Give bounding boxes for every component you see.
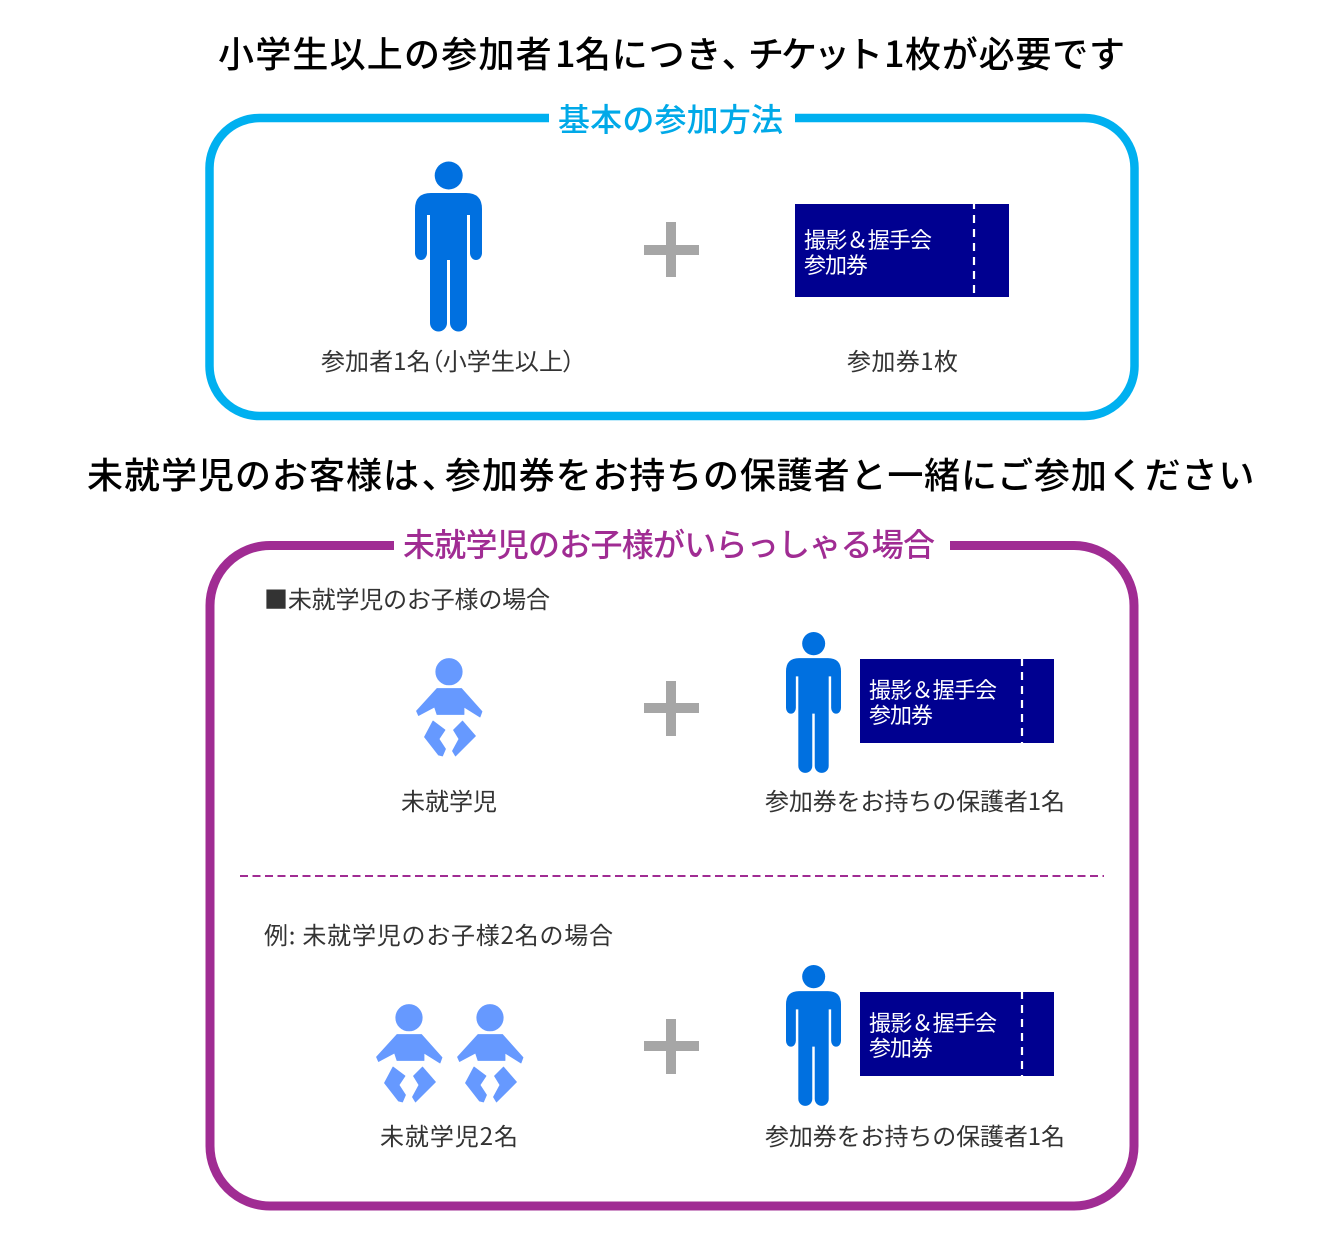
title: ticket requirement: チケット [748,26,880,78]
case 1 heading: ■未就学児のお子様の場合 [264,580,550,615]
icon: guardian [786,632,841,773]
label: two preschool children: 未就学児2名 [380,1117,518,1152]
icon: guardian [786,965,841,1106]
ticket [860,992,1054,1076]
ticket [860,659,1054,743]
ticket: 撮影＆握手会 [869,1006,997,1038]
panel heading: 基本の参加方法 [558,95,783,141]
panel heading: 未就学児のお子様がいらっしゃる場合 [403,520,935,566]
ticket [795,204,1009,297]
label: guardian with ticket: 参加券をお持ちの保護者1名 [765,1117,1065,1152]
icon: adult participant [415,162,482,332]
subtitle: preschool children: 、 [422,447,440,499]
panel: with preschool children [210,520,1134,1206]
ticket: 参加券 [804,248,868,280]
ticket: 参加券 [869,1031,933,1063]
icon: baby one [376,1004,442,1102]
ticket: 撮影＆握手会 [869,673,997,705]
title: ticket requirement: 名につき [575,26,722,78]
subtitle: preschool children: 未就学児のお客様は [87,447,420,499]
title: ticket requirement: 小学生以上の参加者 [218,26,553,78]
icon: plus sign [644,681,699,736]
panel border: blue [209,118,1134,416]
divider [240,875,1104,877]
icon: baby [416,658,482,756]
ticket: 参加券 [869,698,933,730]
panel border: purple [210,546,1134,1206]
case 2 heading: 例: 未就学児のお子様2名の場合 [264,916,613,951]
title: ticket requirement: 1 [555,26,576,78]
title: ticket requirement: 枚が必要です [905,26,1126,78]
title: ticket requirement: 、 [722,26,740,78]
panel: basic participation [209,95,1134,416]
label: one ticket: 参加券1枚 [847,342,958,377]
subtitle: preschool children: 参加券をお持ちの保護者と一緒にご参加ください [445,447,1255,499]
icon: plus sign [644,1019,699,1074]
icon: baby two [458,1004,523,1102]
title: ticket requirement: 1 [884,26,905,78]
label: guardian with ticket: 参加券をお持ちの保護者1名 [765,782,1065,817]
label: one participant: 参加者1名（小学生以上） [321,342,575,377]
ticket: 撮影＆握手会 [804,223,932,255]
label: preschool child: 未就学児 [401,782,497,817]
icon: plus sign [644,222,699,277]
